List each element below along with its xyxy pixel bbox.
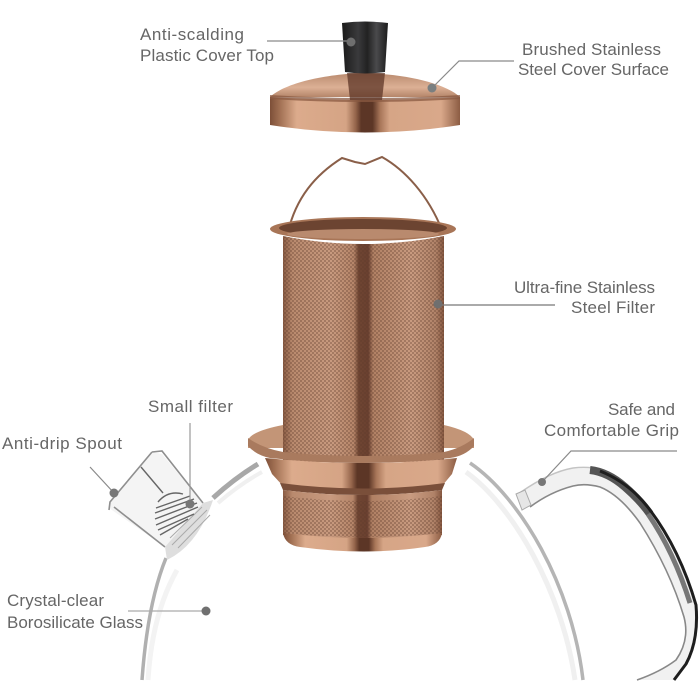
lid dome [270, 73, 460, 97]
filter top flange [270, 217, 456, 241]
callout: glass [7, 591, 210, 632]
collar front lip [248, 438, 474, 463]
callout: glass: Crystal-clear [7, 591, 104, 610]
callout: filter: Ultra-fine Stainless [514, 278, 655, 297]
callout: filter [434, 278, 655, 317]
callout: small filter [148, 397, 233, 508]
spout strainer [141, 467, 198, 535]
callout: glass: Borosilicate Glass [7, 613, 143, 632]
left wall [142, 558, 166, 680]
callout: cover top: Plastic Cover Top [140, 46, 274, 65]
callout: spout: Anti-drip Spout [2, 434, 122, 453]
callout: grip: Comfortable Grip [544, 421, 679, 440]
lower mesh section [283, 490, 442, 540]
callout: spout [2, 434, 122, 498]
filter mesh cylinder [283, 236, 444, 462]
callout: small filter: Small filter [148, 397, 233, 416]
collar bowl [265, 458, 457, 491]
seating collar back rim [248, 425, 474, 448]
filter base [283, 533, 442, 552]
plastic knob [342, 22, 388, 74]
callout: grip: Safe and [608, 400, 675, 419]
bail wire handle [288, 157, 442, 232]
callout: grip [538, 400, 679, 486]
handle [521, 467, 697, 680]
cover lid [270, 22, 460, 132]
callout: cover surface: Brushed Stainless [522, 40, 661, 59]
upper left shoulder [213, 464, 258, 498]
spout neck [165, 500, 213, 560]
teapot glass body [109, 451, 697, 680]
callout: cover surface: Steel Cover Surface [518, 60, 669, 79]
callout: cover top [140, 25, 356, 65]
tea filter [248, 157, 474, 552]
callout: filter: Steel Filter [571, 298, 655, 317]
callout: cover surface [428, 40, 669, 92]
spout [109, 452, 203, 547]
callout: cover top: Anti-scalding [140, 25, 244, 44]
right wall [470, 463, 583, 680]
lid rim [270, 97, 460, 132]
